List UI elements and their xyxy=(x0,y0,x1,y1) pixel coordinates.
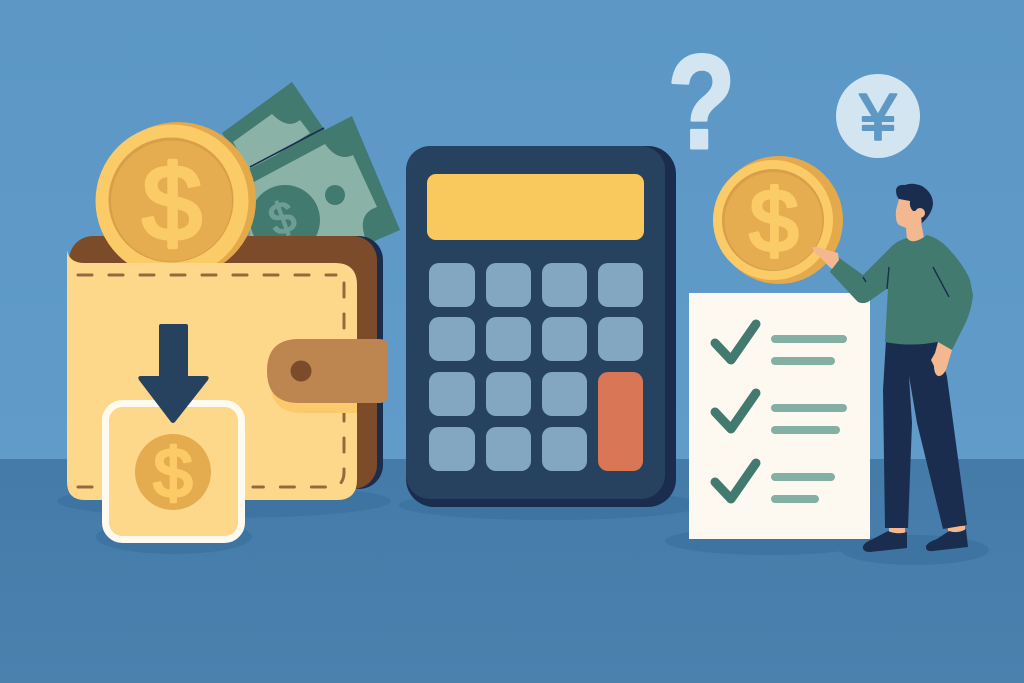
person: trousers xyxy=(883,340,967,529)
person: sweater creases xyxy=(863,267,949,297)
person: hair xyxy=(896,184,933,223)
ground shadows xyxy=(57,484,989,565)
check marks xyxy=(715,324,756,499)
deposit tile with coin: $ xyxy=(154,434,192,512)
banknote: back xyxy=(222,82,345,210)
calculator equals key xyxy=(598,372,643,471)
banknote: front xyxy=(245,116,400,255)
large gold coin xyxy=(96,122,256,278)
calculator keys xyxy=(429,263,643,471)
wallet clasp xyxy=(267,339,388,413)
checklist paper xyxy=(689,293,870,539)
person: neck and face xyxy=(896,195,925,242)
person xyxy=(813,184,973,552)
held gold coin: $ xyxy=(750,171,798,270)
banknote: front: $ xyxy=(263,191,302,246)
background floor xyxy=(0,459,1024,683)
person: ankles xyxy=(889,526,965,534)
calculator body xyxy=(406,146,676,507)
background wall xyxy=(0,0,1024,460)
wallet stitching xyxy=(78,275,344,487)
held gold coin xyxy=(713,156,843,284)
person: shoes xyxy=(863,529,968,552)
deposit tile with coin xyxy=(106,404,242,540)
wallet group xyxy=(67,82,400,500)
checklist lines xyxy=(775,339,843,499)
yen bubble xyxy=(836,74,920,158)
calculator display xyxy=(427,174,644,240)
large gold coin: $ xyxy=(142,143,202,263)
arrow: down into tile xyxy=(138,324,209,423)
wallet front pocket xyxy=(67,250,357,500)
yen bubble: ¥ xyxy=(859,80,897,154)
wallet back xyxy=(69,236,383,489)
person: ear xyxy=(915,208,925,218)
person: sweater xyxy=(830,235,973,350)
question mark: ? xyxy=(668,28,735,177)
person: hand at side xyxy=(931,342,952,376)
calculator xyxy=(406,146,676,507)
person: hand on coin xyxy=(813,247,839,269)
